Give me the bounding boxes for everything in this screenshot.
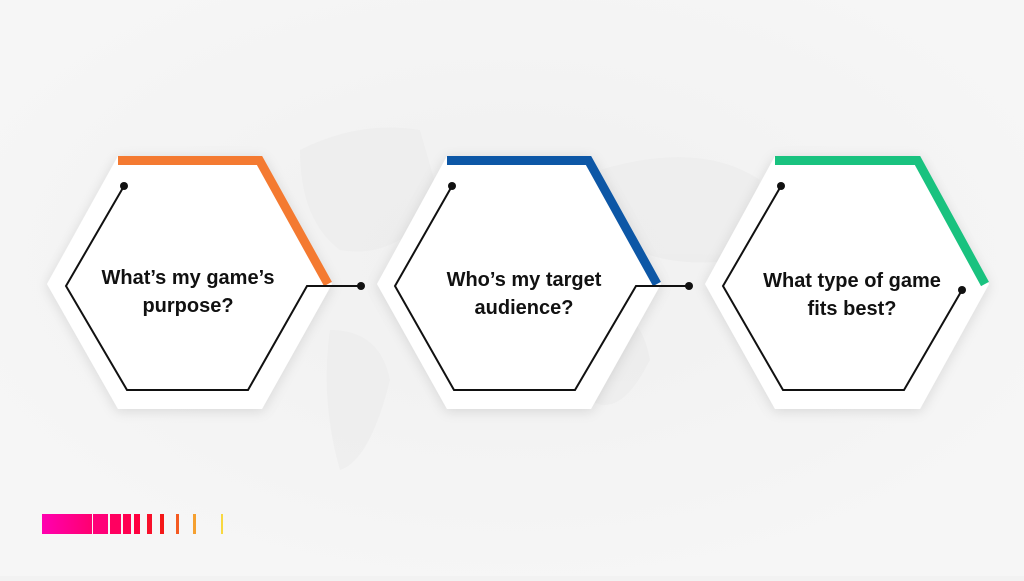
connector line xyxy=(723,186,962,390)
hexagon 3: game type xyxy=(705,156,989,409)
hexagon 1: purpose: purpose? xyxy=(142,295,234,317)
connector line xyxy=(395,186,689,390)
background map blobs xyxy=(300,128,760,470)
text: What’s my game’s xyxy=(101,267,275,289)
decorative color bars xyxy=(42,514,223,534)
text: What type of game xyxy=(763,270,941,292)
hexagon 1: purpose xyxy=(47,156,365,409)
accent blue xyxy=(447,160,657,284)
accent green xyxy=(775,160,985,284)
text: Who’s my target xyxy=(447,269,602,291)
hexagon 2: audience xyxy=(377,156,693,409)
hexagon 3: game type: fits best? xyxy=(808,298,896,320)
connector line xyxy=(66,186,361,390)
accent orange xyxy=(118,160,328,284)
hexagon 2: audience: audience? xyxy=(475,297,573,319)
